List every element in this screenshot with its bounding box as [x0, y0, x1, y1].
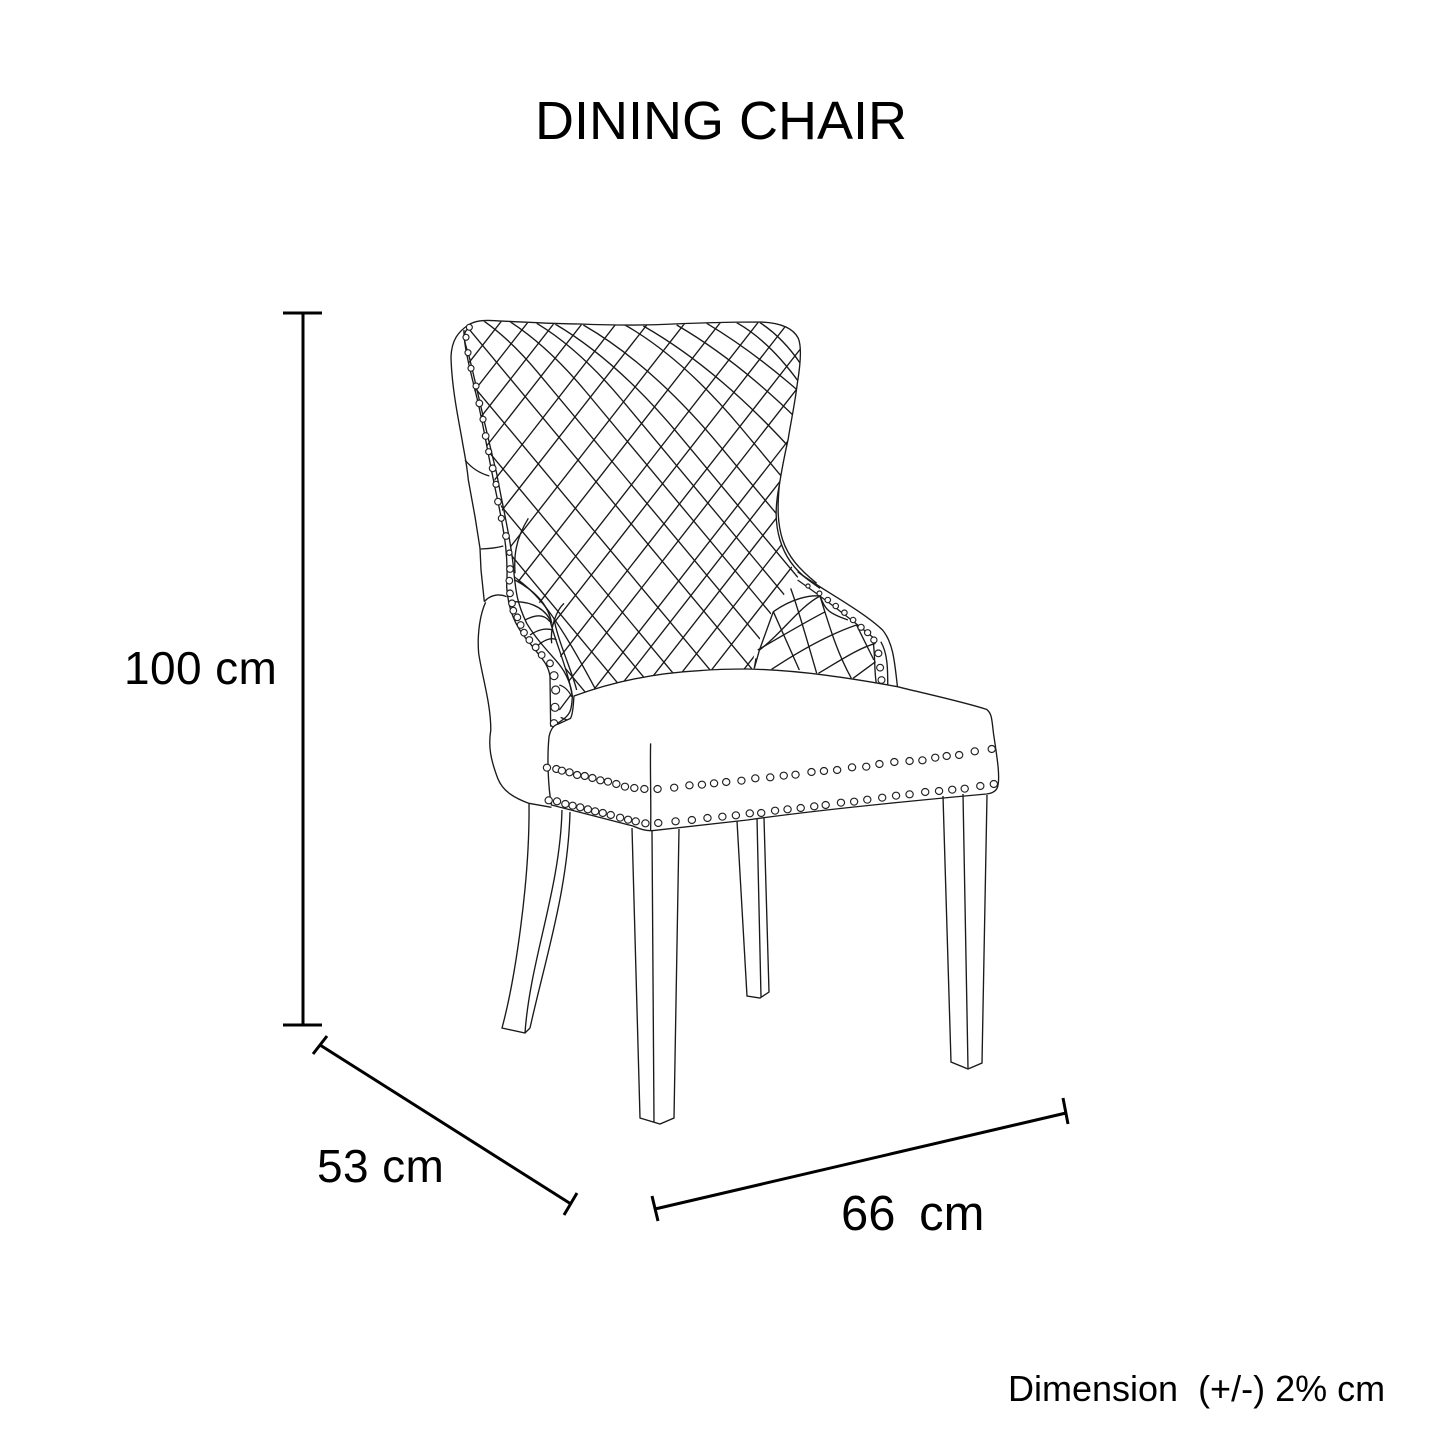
seat cushion	[548, 669, 999, 831]
chair illustration	[451, 320, 1017, 1124]
lower nailhead row	[545, 780, 997, 827]
left arm	[478, 602, 551, 807]
nailhead band edges	[464, 327, 572, 727]
right wing	[754, 572, 897, 687]
depth label: 53 cm	[317, 1140, 444, 1192]
left band nailheads	[463, 324, 560, 727]
depth dimension line	[313, 1036, 577, 1215]
front centre leg	[632, 828, 679, 1124]
seat front corner seam	[649, 743, 652, 830]
chair seat, arm and right wing	[478, 572, 999, 831]
tolerance note: Dimension (+/-) 2% cm	[1008, 1368, 1385, 1409]
width dimension line	[652, 1098, 1068, 1221]
back centre leg	[737, 818, 769, 998]
front right leg	[943, 794, 987, 1069]
width label: 66 cm	[841, 1187, 984, 1241]
chair back	[450, 320, 820, 728]
side panel seams	[465, 460, 507, 602]
quilted diamond pattern	[469, 321, 800, 692]
height dimension line	[283, 313, 322, 1025]
back left curved leg	[502, 803, 570, 1033]
back outer outline	[451, 325, 484, 602]
right wing nailheads	[806, 584, 885, 683]
upper nailhead row	[543, 745, 995, 792]
title: DINING CHAIR	[535, 91, 907, 151]
height label: 100 cm	[124, 642, 277, 694]
